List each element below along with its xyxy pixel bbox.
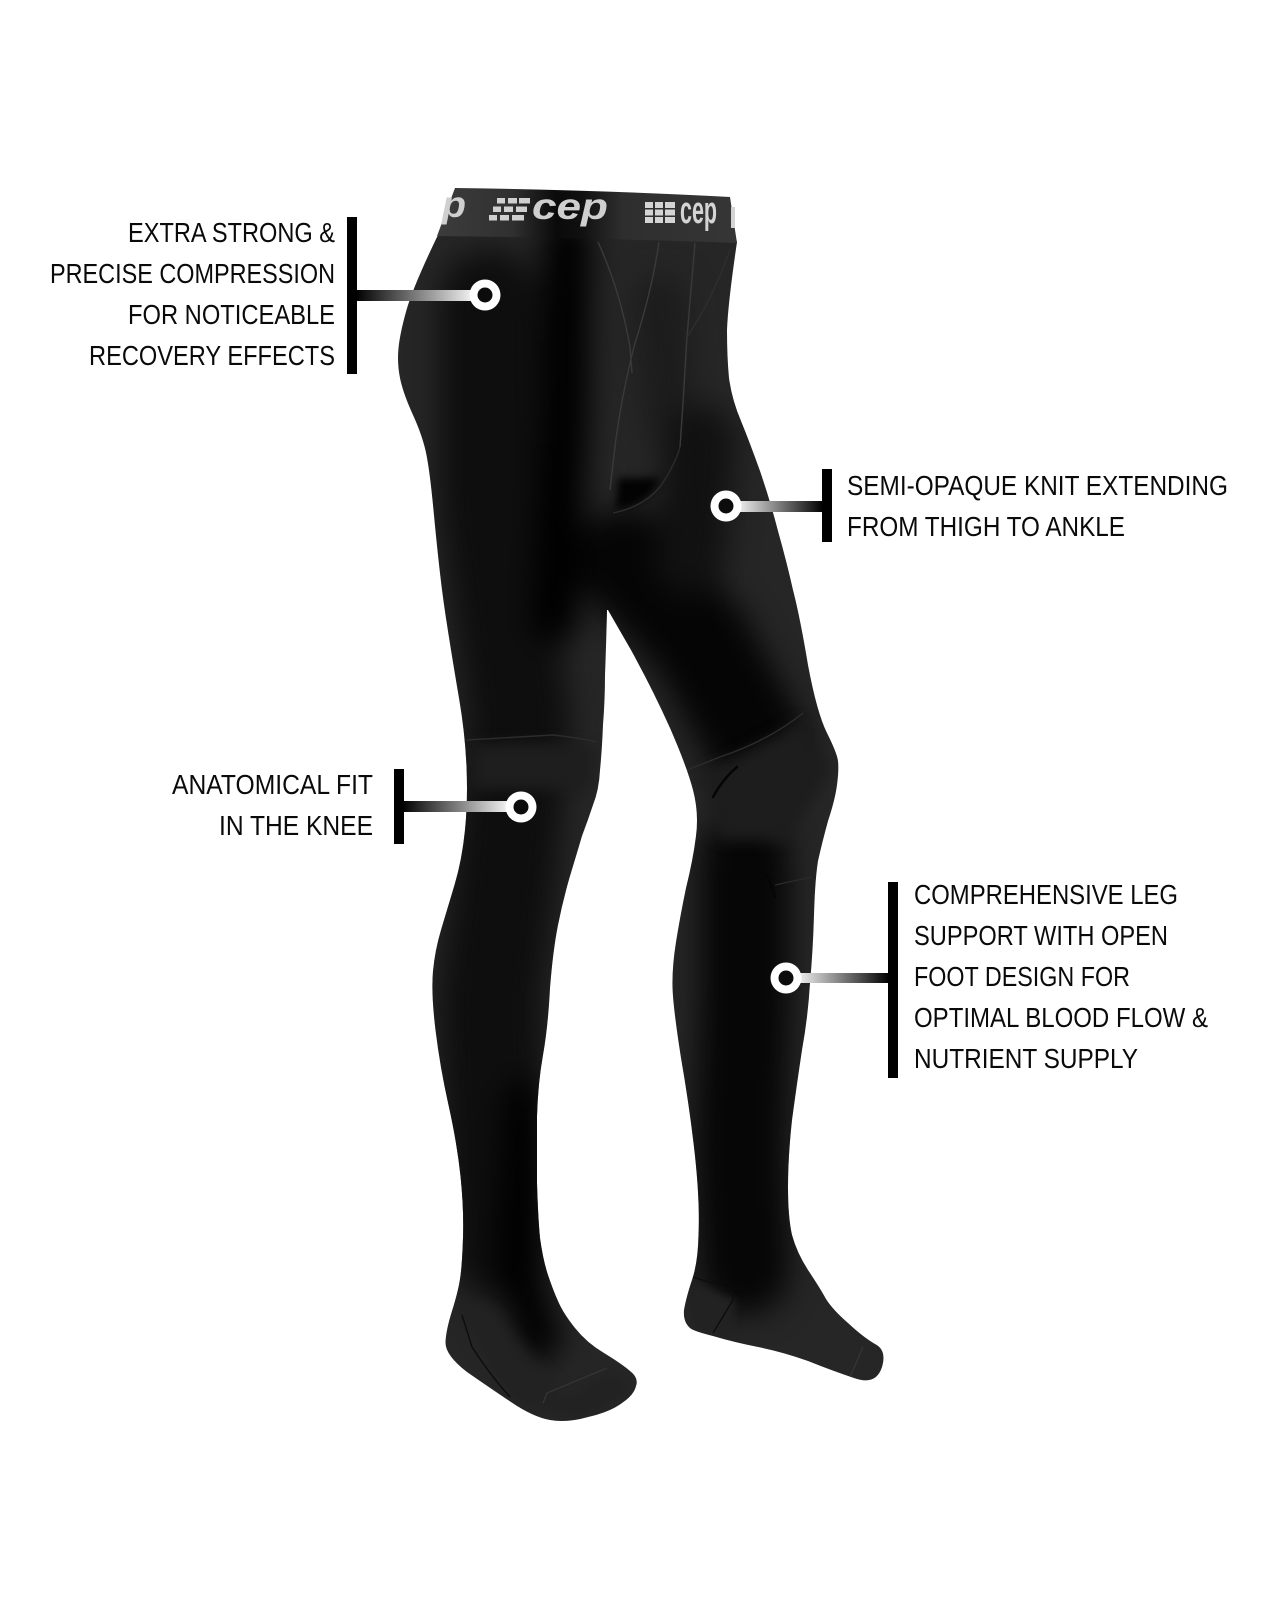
callout text: PRECISE COMPRESSION: [50, 258, 335, 289]
knee panel shading: [472, 742, 596, 790]
callout text: [914, 879, 1208, 1074]
waistband: [437, 188, 737, 243]
connector line: [786, 973, 889, 983]
callout text: SUPPORT WITH OPEN: [914, 920, 1168, 951]
callout: semi-opaque knit: [710, 469, 1228, 542]
callout text: FROM THIGH TO ANKLE: [847, 511, 1125, 542]
callout: extra strong compression: [50, 217, 500, 374]
callout text: EXTRA STRONG &: [128, 217, 335, 248]
callout: anatomical fit: [172, 769, 536, 844]
tights silhouette: [380, 220, 900, 1440]
callout text: [847, 470, 1228, 542]
marker ring: [770, 962, 802, 994]
connector line: [402, 801, 521, 812]
waistband logo right: [645, 190, 735, 232]
marker ring: [506, 792, 536, 822]
marker bar: [347, 217, 357, 374]
callout text: [50, 217, 335, 371]
connector line: [726, 501, 823, 512]
crotch shadow: [616, 478, 660, 510]
callout text: NUTRIENT SUPPLY: [914, 1043, 1138, 1074]
waistband logo center: [489, 186, 608, 227]
callout text: COMPREHENSIVE LEG: [914, 879, 1178, 910]
marker ring: [710, 490, 742, 522]
connector line: [356, 290, 487, 301]
marker ring: [470, 280, 500, 310]
callout text: RECOVERY EFFECTS: [89, 340, 335, 371]
marker bar: [822, 469, 832, 542]
callout text: OPTIMAL BLOOD FLOW &: [914, 1002, 1208, 1033]
callout: leg support: [770, 879, 1208, 1078]
product photo: compression tights: [380, 184, 900, 1440]
foot shading: [452, 1300, 636, 1420]
callout text: ANATOMICAL FIT: [172, 769, 373, 800]
marker bar: [394, 769, 404, 844]
infographic canvas: [52, 188, 1226, 1421]
callout text: [172, 769, 373, 841]
callout text: FOR NOTICEABLE: [128, 299, 335, 330]
waistband logo left partial: p: [441, 184, 466, 225]
callout text: IN THE KNEE: [219, 810, 373, 841]
callout text: SEMI-OPAQUE KNIT EXTENDING: [847, 470, 1228, 501]
waistband logo right: cep: [680, 190, 717, 232]
marker bar: [888, 882, 898, 1078]
seams: [462, 242, 863, 1403]
callout text: FOOT DESIGN FOR: [914, 961, 1130, 992]
waistband logo center: cep: [532, 186, 608, 227]
